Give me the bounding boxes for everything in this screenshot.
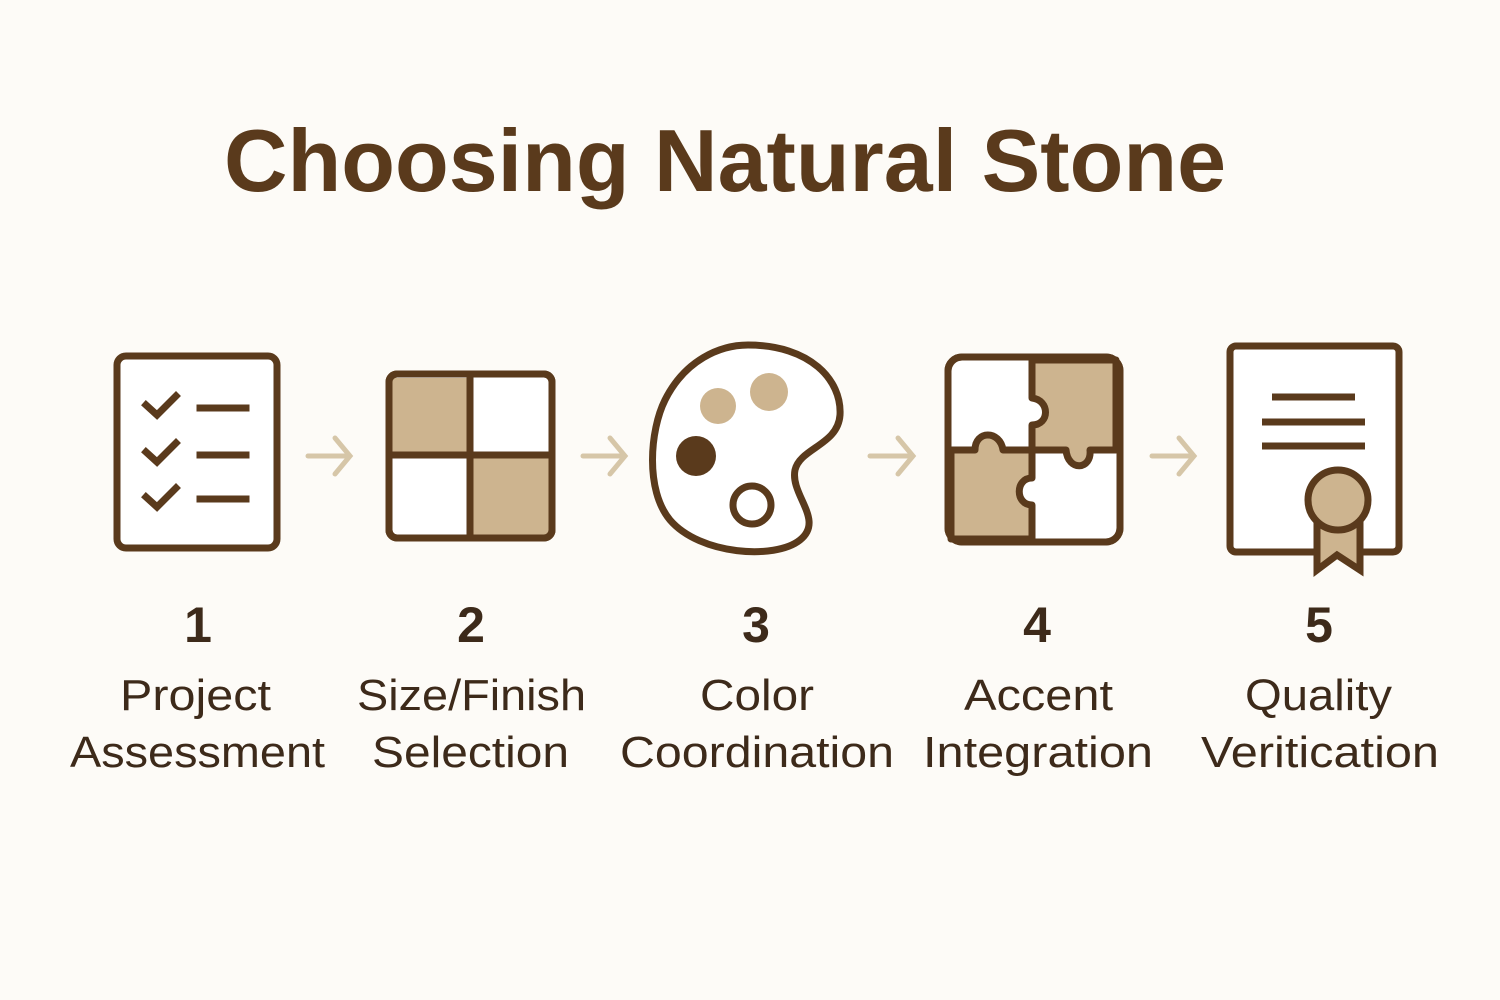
step 5: Quality: [1245, 671, 1392, 720]
step 2: [357, 597, 586, 777]
step 5: Veritication: [1201, 728, 1439, 777]
step 4: [923, 597, 1153, 777]
title: Choosing Natural Stone: [224, 111, 1226, 210]
step 4: 4: [1023, 597, 1051, 653]
icon: puzzle: [948, 357, 1120, 542]
icon: palette: [652, 345, 840, 552]
arrow 1: [308, 438, 350, 474]
step 5: [1201, 597, 1439, 777]
step 1: Project: [120, 671, 271, 720]
step 4: Integration: [923, 728, 1153, 777]
arrow 2: [583, 438, 625, 474]
step 3: [620, 597, 894, 777]
step 4: Accent: [964, 671, 1113, 720]
icon: certificate: [1230, 346, 1399, 570]
step 2: 2: [457, 597, 485, 653]
step 2: Selection: [372, 728, 569, 777]
step 3: Coordination: [620, 728, 894, 777]
arrow 3: [870, 438, 913, 474]
step 1: [70, 597, 325, 777]
step 5: 5: [1305, 597, 1333, 653]
icon: tiles: [389, 374, 552, 538]
step 1: Assessment: [70, 728, 325, 777]
icon: checklist: [117, 356, 277, 548]
step 2: Size/Finish: [357, 671, 586, 720]
step 3: 3: [742, 597, 770, 653]
step 1: 1: [184, 597, 212, 653]
step labels: [70, 597, 1439, 777]
arrow 4: [1152, 438, 1194, 474]
step 3: Color: [700, 671, 814, 720]
